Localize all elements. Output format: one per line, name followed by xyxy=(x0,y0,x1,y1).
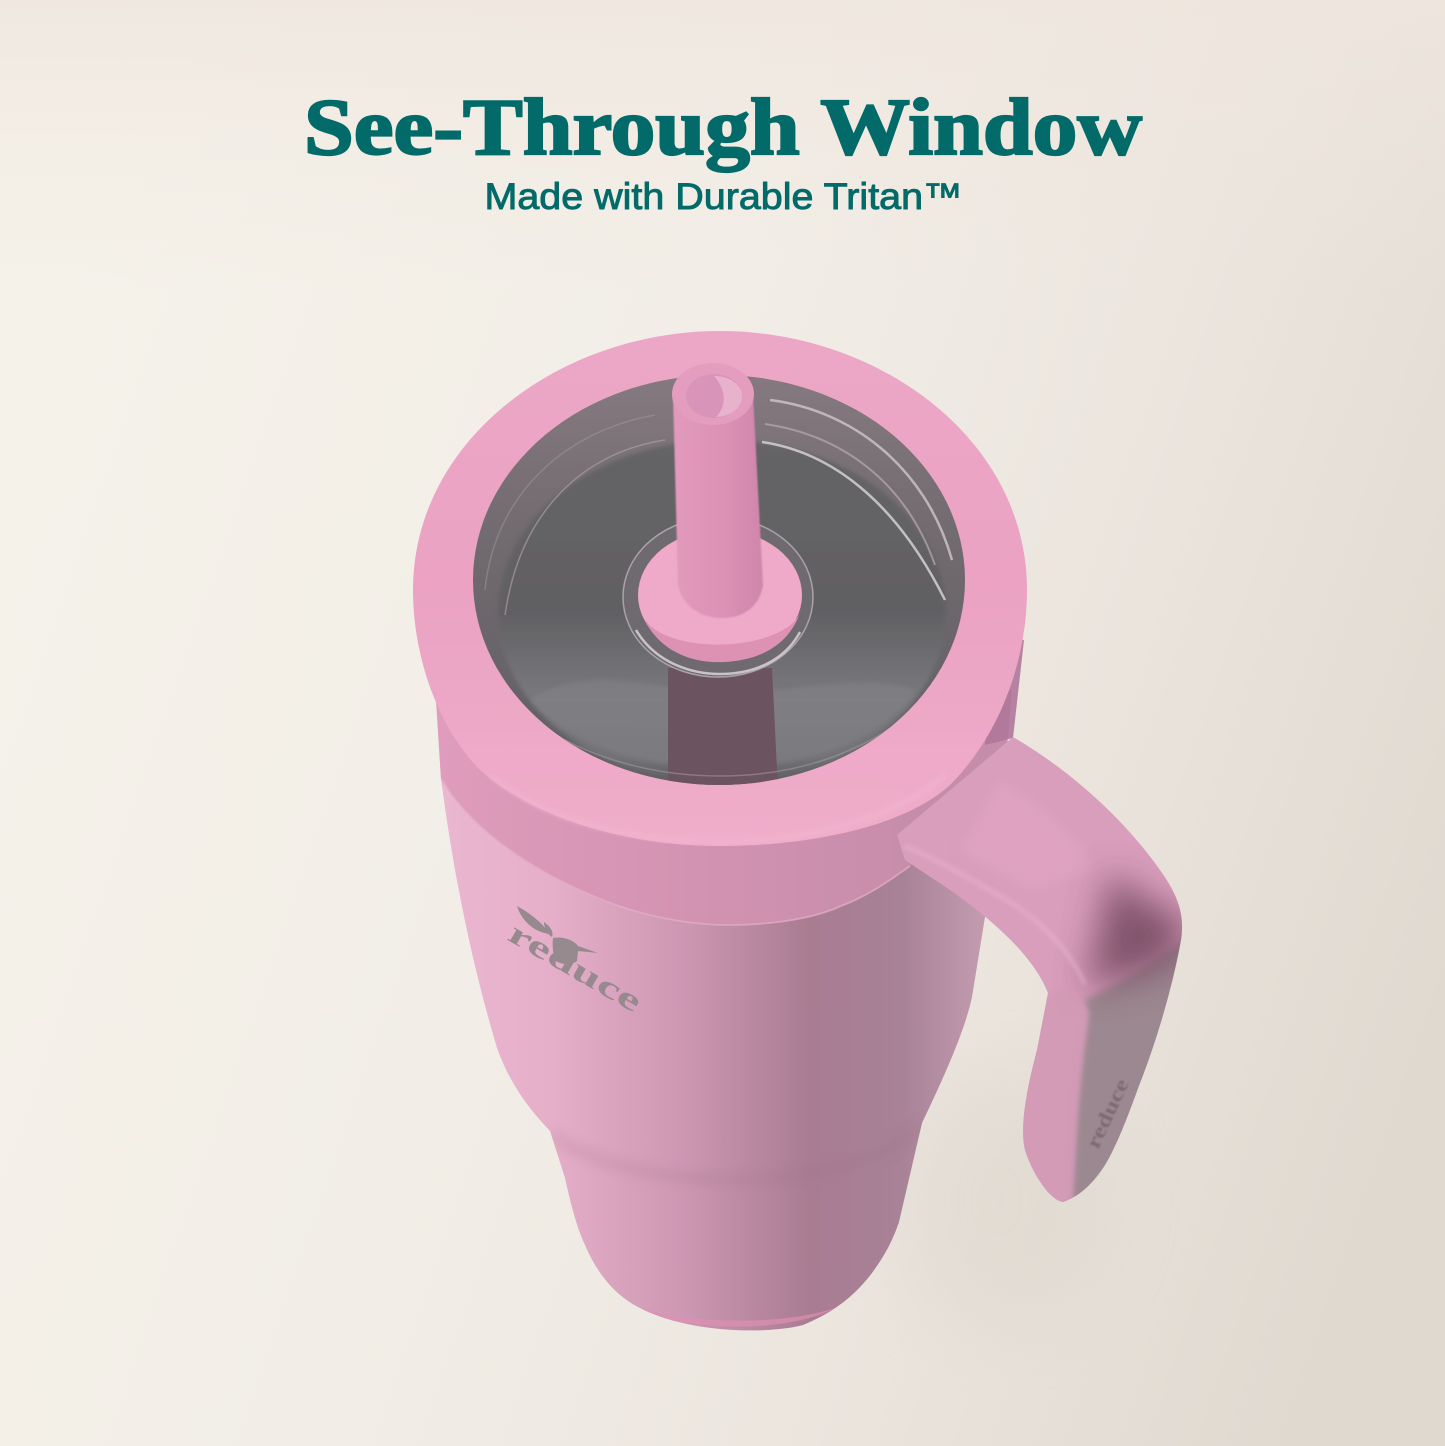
body step shading xyxy=(552,1124,923,1327)
logo leaves xyxy=(517,906,549,934)
handle xyxy=(890,730,1190,1210)
straw xyxy=(673,395,763,618)
logo wordmark: reduce xyxy=(502,915,648,1019)
subtitle: Made with Durable Tritan™ xyxy=(484,176,962,217)
floor shadow xyxy=(890,1070,1110,1330)
straw hole lighter inner xyxy=(714,376,742,417)
handle embossed logo: reduce xyxy=(1083,1076,1134,1152)
bottom interior light area xyxy=(630,752,810,762)
see-through window xyxy=(470,370,970,790)
lid ring lower edge highlight xyxy=(490,775,945,841)
handle inner strip xyxy=(1023,996,1088,1202)
logo: reduce xyxy=(502,906,648,1019)
glass inner floor xyxy=(498,440,946,784)
straw stopper disc xyxy=(638,530,802,660)
infographic canvas xyxy=(308,0,1445,1446)
stopper glass ring bright glint xyxy=(636,630,800,674)
straw hole xyxy=(686,374,742,418)
collar seam xyxy=(442,779,910,925)
straw tip xyxy=(672,363,754,425)
stopper glass ring xyxy=(623,517,813,677)
title: See-Through Window xyxy=(304,82,1143,172)
lid collar xyxy=(436,690,1012,925)
handle dark corner xyxy=(1085,870,1190,990)
handle top face highlight xyxy=(960,780,1095,890)
handle grey outer face xyxy=(1070,939,1181,1199)
straw reflection xyxy=(668,668,778,790)
tumbler body xyxy=(436,700,1000,1330)
tumbler product illustration xyxy=(413,331,1190,1330)
handle highlight crease xyxy=(905,846,1085,985)
glass threads xyxy=(485,400,952,615)
lid dark right edge xyxy=(985,640,1024,745)
lower rim glint xyxy=(562,729,888,777)
stopper disc shadow edge xyxy=(640,610,801,662)
glass outer rim xyxy=(470,370,970,790)
handle base xyxy=(890,730,1190,1210)
lid ring xyxy=(413,331,1027,846)
logo cup xyxy=(553,937,598,964)
